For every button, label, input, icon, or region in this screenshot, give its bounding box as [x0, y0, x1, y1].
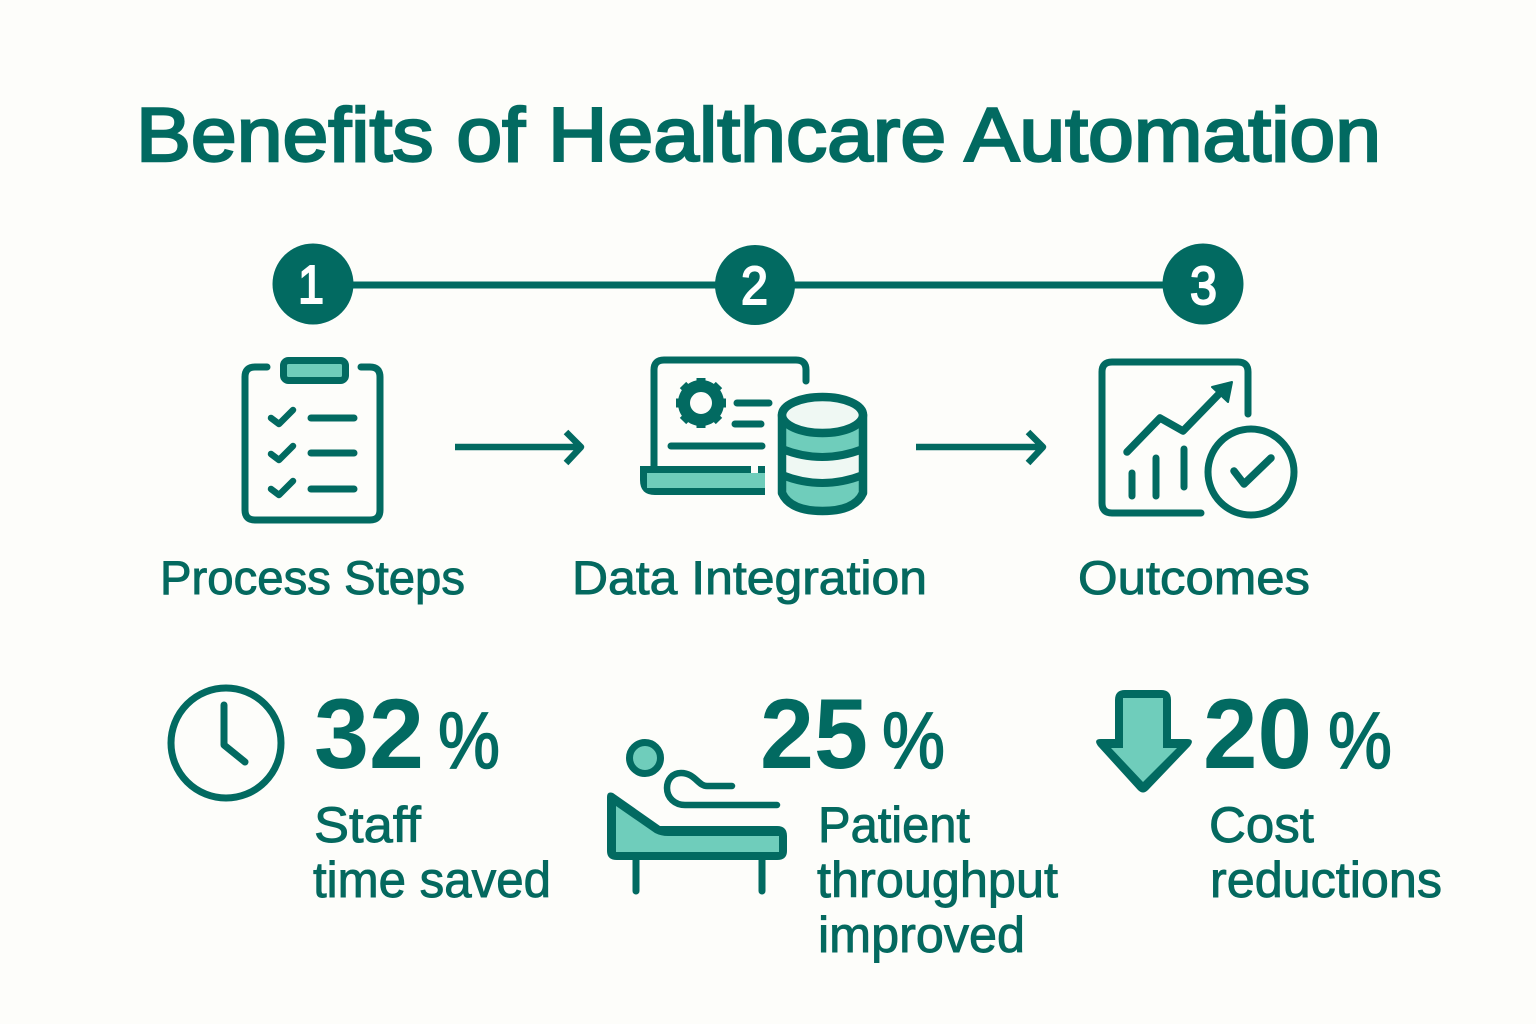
- icon: chart with check: [1102, 362, 1294, 515]
- label: process steps: Process Steps: [160, 551, 465, 604]
- value 20%: %: [1328, 696, 1392, 785]
- description: Patient: [818, 797, 970, 853]
- description: reductions: [1210, 852, 1442, 908]
- description: [1209, 797, 1442, 908]
- icon: laptop with database: [640, 360, 863, 511]
- icon: clock: [171, 688, 281, 798]
- step 2 badge: 2: [741, 256, 768, 316]
- description: [817, 797, 1058, 963]
- icon: clipboard checklist: [245, 360, 380, 520]
- icon: patient in bed: [607, 742, 787, 891]
- title: Benefits of Healthcare Automation: [136, 93, 1381, 178]
- value 32%: 32: [314, 678, 424, 789]
- label: outcomes: Outcomes: [1078, 551, 1310, 604]
- value 25%: [760, 678, 945, 789]
- step 1 badge: 1: [298, 255, 324, 315]
- stat: staff time saved: [313, 678, 551, 908]
- value 32%: %: [438, 696, 500, 785]
- description: throughput: [817, 852, 1058, 908]
- description: time saved: [313, 852, 551, 908]
- description: Cost: [1209, 797, 1314, 853]
- value 20%: 20: [1203, 678, 1312, 789]
- stat: cost reductions: [1203, 678, 1442, 908]
- step 3 badge: 3: [1190, 256, 1217, 316]
- icon: database cylinder: [782, 397, 863, 511]
- icon: gear: [676, 378, 726, 428]
- description: [313, 797, 551, 908]
- step 3 badge: [1162, 244, 1244, 324]
- description: Staff: [314, 797, 421, 853]
- value 25%: 25: [760, 678, 868, 789]
- description: improved: [818, 907, 1025, 963]
- value 25%: %: [882, 696, 945, 785]
- label: data integration: Data Integration: [572, 551, 927, 604]
- icon: down arrow: [1096, 690, 1192, 792]
- step timeline: [272, 244, 1244, 325]
- arrow: process to data: [455, 432, 581, 463]
- arrow: data to outcomes: [916, 432, 1043, 463]
- step 2 badge: [715, 245, 795, 325]
- value 20%: [1203, 678, 1392, 789]
- stat: patient throughput: [760, 678, 1058, 963]
- step 1 badge: [272, 244, 354, 324]
- value 32%: [314, 678, 500, 789]
